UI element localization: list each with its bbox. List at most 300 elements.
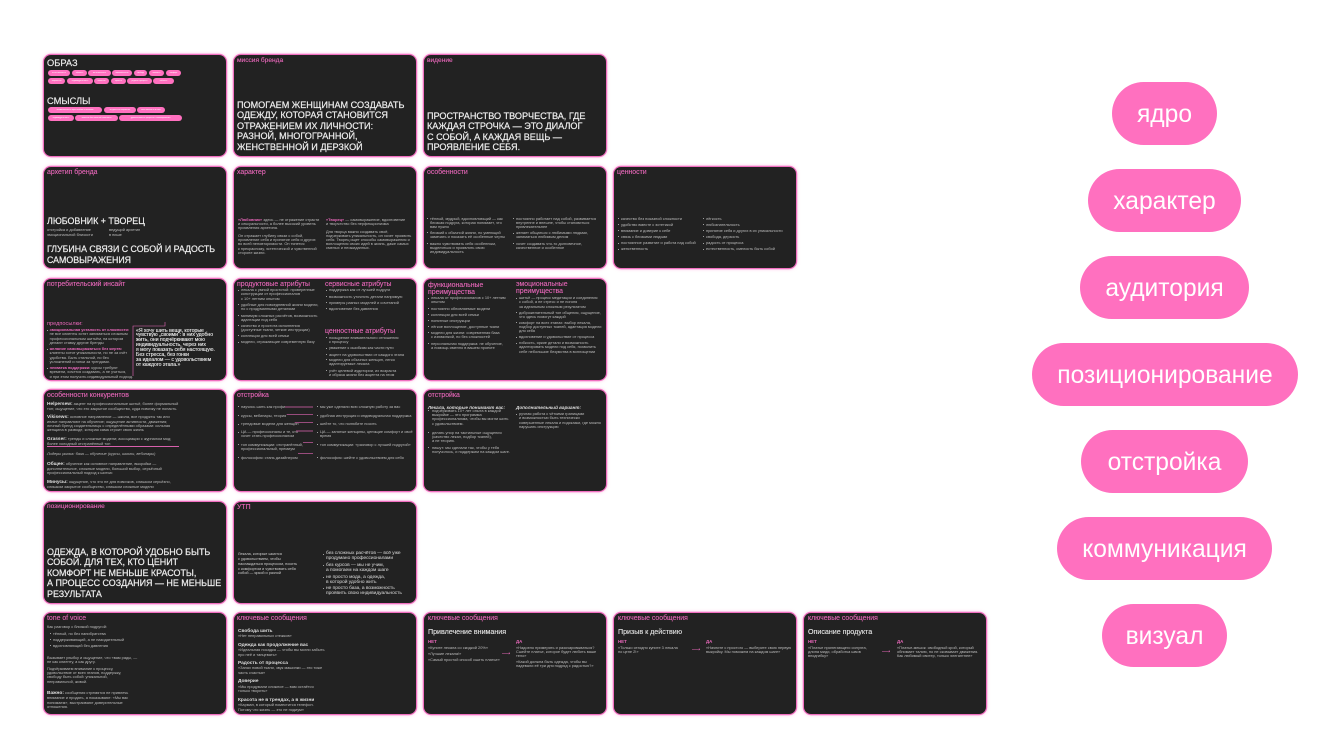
list item: внимание и доверие к себе [621,228,670,233]
text: любовник: «Любовник» здесь — не отражение страсти [238,217,319,222]
archetype statement [47,243,215,264]
list item [513,242,582,250]
list item: усложнений и гонки за трендами. [50,359,110,364]
mission statement [237,100,404,152]
subheading: Дополнительный вариант: [516,404,581,410]
tag: комфорт [166,70,181,76]
heading: особенности [427,169,468,176]
pill: коммуникация: коммуникация [1082,536,1247,563]
tag: лёгкость [72,70,87,76]
list item: в которой удобно жить [326,580,376,585]
panel: ключевые сообщения, смыслы [234,613,416,714]
intro text: Как разговор с близкой подругой: [47,624,107,629]
list item: опытом [431,299,445,304]
text: vikisews: иначе направляют на обучение; ощущение активности, движения; [47,419,167,424]
list item: минимум сложных расчётов, возможность [241,313,317,318]
list item [238,430,298,439]
list item: нарушать инструкцию [519,424,559,429]
heading: функциональные преимущества [428,282,484,296]
list item: понятные инструкции [431,318,470,323]
list item: без курсов — мы не учим, [326,563,384,568]
heading: эмоциональные преимущества: преимущества [516,288,563,295]
list item: поддержка как от лучшей подруги [329,287,390,292]
list item: индивидуальность [430,249,464,254]
unique proposition text: с удовольствием, чтобы [238,557,281,561]
list item [427,217,503,229]
yes item [897,645,978,658]
tag: индивидуальность [48,115,74,121]
quote frame [132,322,166,376]
list item: внутренне и внешне, чтобы становиться [516,220,589,225]
panel: отстройка, сравнение [234,390,416,491]
quote: от каждого этапа.» [136,362,180,368]
list item: тон коммуникации: «разговор с лучшей подругой» [320,442,411,447]
list item: трендовые модели для женщин [241,421,299,426]
list item: адаптации под себя [241,317,277,322]
list item: лекала с умной простотой: проверенные [241,287,315,292]
yes item: Сшейте платье, которое будет любить ваше [516,649,596,654]
callout: важно: отношения. [47,704,68,709]
tag: внимательность [48,107,102,113]
message: часть счастья» [238,670,265,675]
text: творец: «Творец» — самовыражение, вдохновение [326,217,405,222]
vision statement: КАЖДАЯ СТРОЧКА — ЭТО ДИАЛОГ [427,121,582,131]
text: grasser: более холодный отстранённый тон [47,441,110,446]
list item: модели для обычных женщин, легко [329,357,395,362]
pill: аудитория [1080,256,1249,319]
label: да: ДА [897,638,903,644]
text: common [47,461,162,475]
text: vikisews [47,414,170,432]
list item: философия: стань дизайнером [241,455,298,460]
tag: качество [94,78,109,84]
text: helpersew [47,401,178,411]
list item: тёплый, мудрый, вдохновляющий — как [430,216,503,221]
text: grasser: Grasser: тренды и сложные модели; ассоциации с журналом мод; [47,436,171,442]
list item: профессиональным шитьём, на котором [50,336,123,341]
quote: за идеалом — с удовольствием [136,357,211,363]
quote [136,328,215,368]
quote: «Я хочу шить вещи, которые [136,328,204,334]
yes item [706,645,791,654]
no item: «Лучшие лекала!» [428,651,461,656]
heading: ключевые сообщения [237,615,307,622]
message: про неё и танцевать» [238,652,277,656]
panel: особенности конкурентов [44,390,226,491]
list item: что здесь помогут каждой [519,314,566,319]
list item [513,217,596,229]
heading: характер [237,169,266,176]
callout: важно: Важно: сообщения стремятся не привлечь [47,690,128,696]
list item: для себя [519,328,535,333]
panel: привлечение внимания [424,613,606,714]
tag: женственность: женственность [93,72,106,74]
pill: отстройка: отстройка [1108,449,1221,476]
panel: архетип бренда [44,167,226,268]
list item [428,409,508,426]
list item: мы уже сделали всю сложную работу за вас [320,404,400,409]
label: нет: НЕТ [428,638,437,644]
quote: Без стресса, без гонки [136,352,189,358]
positioning statement: ОДЕЖДА, В КОТОРОЙ УДОБНО БЫТЬ [47,547,210,557]
list item: продумано профессионалами [326,556,393,561]
message: Красота не в трендах, а в жизни [238,698,314,703]
quote: чувствую „своими“: в них удобно [136,332,213,338]
unique proposition text [238,552,297,575]
text: downsides [47,479,171,489]
list item [238,303,318,311]
list item: женственность [621,246,648,251]
pill: позиционирование: позиционирование [1057,362,1273,389]
list item: качественное и особенное [516,245,564,250]
panel: УТП [234,502,416,603]
text: downsides: Минусы: ощущение, что это не для новичков, слишком серьёзно, [47,479,171,485]
positioning statement: СОБОЙ. ДЛЯ ТЕХ, КТО ЦЕНИТ [47,557,178,567]
panel: tone of voice [44,613,226,714]
tag: удовольствие: удовольствие от процесса и самовыражения [131,117,170,119]
list item: и возможностью быть технически [519,415,580,420]
tag: внимательность: внимательность через любовь к мелочам [57,109,93,111]
list item [427,231,505,239]
no item: «Только сегодня купите 3 лекала [618,645,678,650]
tag: комфорт: комфорт [170,72,177,74]
list item [323,564,388,573]
list item: профессиональный, премиум [241,446,295,451]
tag: качество без сложности: качество без показной сложности [82,117,111,119]
yes item [516,645,596,658]
list item: постоянно обновляемые модели [431,306,490,311]
list item: принятие себя и других в их уникальности [706,228,783,233]
tag: гибкость: гибкость [160,80,167,82]
message: «Мы продумали сложное — вам остаётся [238,684,314,689]
tag: качество без сложности [75,115,118,121]
list item: естественность, смелость быть собой [706,246,775,251]
note: secondary archetype: эмоциональной близости [47,232,93,237]
message: «Нет неправильных стежков» [238,633,292,638]
message: Одежда как продолжение вас [238,643,308,648]
heading: миссия бренда [237,57,283,64]
list item [428,331,500,339]
list item: коллекции для всей семьи [241,333,289,338]
unique proposition text: наслаждаться процессом, носить [238,562,297,566]
panel: атрибуты [234,279,416,380]
list item: с 10+ летним опытом [241,296,280,301]
message [238,698,314,712]
text: творец details [326,229,412,250]
quote: индивидуальность, через них [136,342,206,348]
no item: вподгибку» [808,653,828,658]
no item [618,645,678,654]
heading: продуктовые атрибуты: продуктовые атрибуты [237,281,310,288]
heading: эмоциональные преимущества: эмоциональные [516,281,568,288]
arrow [882,650,890,652]
panel: призыв к действию [614,613,796,714]
list item: выделяться и проявлять свою [430,245,485,250]
tag: лёгкость: лёгкость [76,72,83,74]
unique proposition text: Лекала, которые шьются [238,552,282,556]
note: leading archetype: ведущий архетип [109,227,140,232]
heading: особенности конкурентов [47,392,129,399]
yes item: выкройку. Мы поможем на каждом шаге» [706,649,780,654]
panel: потребительский инсайт [44,279,226,380]
pill: визуал [1102,604,1227,667]
list item [317,430,413,439]
list item [238,314,317,322]
text: common: дополнительное, сложные модели, большой выбор, серьёзный [47,466,162,471]
list item: тон коммуникации: отстранённый, [241,442,303,447]
list item: а помогаем на каждом шаге [326,568,388,573]
archetype statement: САМОВЫРАЖЕНИЯ [47,254,131,264]
list item: ручная работа с чёткими границами [519,411,584,416]
list item [326,369,396,377]
tag: яркость [111,78,126,84]
text: творец details: подчеркивать уникальность, он хочет проявить [326,233,411,238]
list item: коллекции для всей семьи [431,312,479,317]
tag: творчество: творчество [52,80,61,82]
list item: удобная инструкция и индивидуальная поддержка [320,413,411,418]
list item [428,342,503,350]
list item: замечать и показать её особенные черты [430,234,505,239]
yes item: «Надоело примерять и разочаровываться? [516,645,594,650]
pill: ядро [1112,82,1217,145]
subheading: предпосылки: предпосылки: [47,321,83,327]
list item [513,231,588,240]
text: market leaders: Лидеры рынка: база — обучение (курсы, школы, вебинары) [47,451,155,456]
pill: отстройка [1081,430,1248,493]
vision statement: ПРОЯВЛЕНИЕ СЕБЯ. [427,142,520,152]
label: нет: НЕТ [808,638,817,644]
list item: лёгкое воплощение, доступные ткани [431,324,499,329]
list item: качество и простота исполнения [241,323,300,328]
list item: модели, отражающие современную базу [241,339,315,344]
vision statement [427,111,586,152]
panel: позиционирование [44,502,226,603]
text: любовник details: проявление себя и принятие себя и других [238,237,316,242]
text block: неправильной, живой. [47,678,87,684]
yes item: «Начните с простого — выберите свою первую [706,645,791,650]
list item: вдохновение без давления [329,306,378,311]
list item: адаптировать модели под себя, позволить [519,344,596,349]
heading: ценности [617,169,647,176]
mission statement: ПОМОГАЕМ ЖЕНЩИНАМ СОЗДАВАТЬ [237,100,404,110]
tag: радость процесса: радость процесса [132,80,147,82]
list item: возможность уточнять детали напрямую [329,294,402,298]
quote: жить, они подчёркивают мою [136,337,205,343]
tag: радость процесса [127,78,152,84]
heading: смыслы: СМЫСЛЫ [47,96,90,106]
heading: ключевые сообщения [618,615,688,622]
list item: радость от процесса [706,240,743,245]
list item: постоянное развитие и работа над собой [621,240,696,245]
list item: клиенты хотят уникальности, но не за счёт [50,350,127,355]
tag: естественность: естественность [52,72,66,74]
list item: шейте то, что полюбите носить [320,421,377,426]
mission statement: ЖЕНСТВЕННОЙ И ДЕРЗКОЙ [237,142,363,152]
label: да: ДА [706,638,712,644]
tag: индивидуальность [67,78,93,84]
positioning statement: РЕЗУЛЬТАТА [47,589,102,599]
heading: видение [427,57,453,64]
tag: яркость: яркость [115,80,122,82]
list item [428,446,510,454]
unique proposition text: с комфортом и чувствовать себя [238,567,296,571]
tag: творчество [48,78,65,84]
list item: близкий к обычной жизни, но умеющий [430,230,501,235]
panel: преимущества [424,279,606,380]
list item: не просто база, а возможность [326,586,395,591]
message: «Запах новой ткани, звук машинки — это тоже [238,665,322,670]
no item: по цене 2!» [618,649,639,654]
tag: свобода [134,70,147,76]
message: Потому что жизнь — это не подиум» [238,706,304,712]
heading: ценностные атрибуты: ценностные атрибуты [325,328,395,334]
yes item: надевали её три дня подряд с радостью?» [516,663,594,668]
list item: вдохновение и удовольствие от процесса [519,334,594,339]
callout: важно: понимаем», выстраивают доверительные [47,700,123,705]
note: leading archetype [109,227,140,237]
arrow [502,652,510,654]
tag: удовольствие [119,115,182,121]
text: любовник details [238,233,317,255]
pill: аудитория: аудитория [1105,275,1224,302]
list item: не все клиенты хотят заниматься сложным [50,331,128,336]
divider line [47,445,179,448]
tag: женственность и сила [137,107,165,113]
heading: отстройка [428,392,460,399]
archetype name: ЛЮБОВНИК + ТВОРЕЦ [47,216,145,226]
mission statement: РАЗНОЙ, МНОГОГРАННОЙ, [237,131,358,141]
callout: важно: внимание и продать, а показывают: «Мы вас [47,695,128,700]
text: творец: и творчество без перфекционизма [326,221,389,226]
list item: свобода, дерзость [706,234,739,239]
panel: ценности [614,167,796,268]
heading: функциональные преимущества: преимущества [428,288,475,296]
heading: УТП [237,504,251,511]
message [238,643,324,657]
tag: мягкость [149,70,164,76]
list item [323,552,401,562]
list item: качество без показной сложности [621,216,682,221]
callout: важно [47,690,128,709]
heading: образ: ОБРАЗ [47,58,78,68]
list item: проявить свою индивидуальность [326,591,402,596]
list item: получилось, и поддержим на каждом шаге. [432,449,510,454]
list item: не просто мода, а одежда, [326,575,385,580]
heading: ключевые сообщения [428,615,498,622]
yes item: обнимает талию, но не сковывает движения. [897,649,978,654]
list item: (доступные ткани, четкие инструкции) [241,327,310,332]
list item [238,324,310,332]
heading: архетип бренда [47,169,97,176]
list item: вам нужно [430,224,449,229]
list item: за идеальным сложным результатом [519,304,586,309]
text: любовник details: стороне жизни. [238,250,266,255]
list item: заниматься любимым делом [516,234,568,239]
text: любовник: и сексуальности, а более высокий уровень [238,221,316,226]
tag: женственность [88,70,111,76]
list item: постоянно работает над собой, развивается [516,216,596,221]
list item: подбор доступных тканей, адаптация модели [519,324,601,329]
text: helpersew: тон; ощущение, что это закрытое сообщество, куда новичку не попасть. [47,406,177,411]
list item: совершенные лекала и подсказки, где можно [519,420,601,425]
tag: внутреннее творчество [104,107,136,113]
yes item: тело» [516,653,526,658]
list item [47,366,133,379]
list item: и образа жизни без акцента на этом [329,372,394,377]
tag: индивидуальность: индивидуальность [72,80,88,82]
panel: отстройка, лекала [424,390,606,491]
list item: желает общаться с любимыми людьми, [516,230,588,235]
pill: позиционирование [1032,343,1298,406]
list item: хочет стать профессионалом [241,433,294,438]
list item: поощрение внимательного отношения [329,335,399,340]
list item: делать упор на тактильные ощущения [432,430,502,435]
subheading: Описание продукта [808,628,872,636]
list item: любознательность [706,222,740,227]
yes item: Как любимый свитер, только элегантнее» [897,653,972,658]
text: творец details: Для творца важно создавать своё, [326,229,388,234]
list item: персональная поддержка: не обучение, [431,341,503,346]
list item: с собой, а не стресс и не погоня [519,299,577,304]
panel: образ и смыслы [44,55,226,156]
list item [516,296,598,309]
text block [47,666,121,684]
list item [427,242,496,254]
text block: удовольствие от всех этапов, поддержку, [47,670,121,675]
heading: ключевые сообщения [808,615,878,622]
list item: научись шить как профи [241,404,285,409]
text block: свободу быть собой: уникальной, [47,674,108,679]
text block [47,655,138,664]
list item: вдохновляющий без давления [53,643,108,648]
list item: модели для жизни: современная база [431,330,500,335]
list item: без сложных расчётов — всё уже [326,551,401,556]
yes item [516,659,594,668]
list item [516,321,601,334]
list item [326,336,399,344]
archetype statement: ГЛУБИНА СВЯЗИ С СОБОЙ И РАДОСТЬ [47,244,215,254]
text: vikisews: Vikisews: основное направление — школа, все продукты так или [47,414,170,420]
list item: связь с близкими людьми [621,234,667,239]
list item [428,431,502,444]
panel: миссия бренда [234,55,416,156]
list item: и при этом получить индивидуальный подход. [50,374,133,379]
list item [323,587,402,596]
tag: индивидуальность: индивидуальность [53,117,69,119]
note: secondary archetype [47,227,93,237]
list item: комфорт на всех этапах: выбор лекала, [519,320,591,325]
tag: естественность [48,70,70,76]
list item: с изюминкой, но без сложностей [431,334,490,339]
pill: характер: характер [1113,188,1216,215]
list item: адаптируемые лекала [329,361,369,366]
text: vikisews: личный бренд создательницы с определёнными образами: сильная [47,423,170,428]
list item: ЦА — занятые женщины, ценящие комфорт и своё [320,429,413,434]
list item: шитьё — процесс медитации и соединения [519,295,598,300]
text: любовник: проявления архетипа. [238,225,278,230]
list item: а не теорию. [432,438,455,443]
panel: особенности [424,167,606,268]
text: helpersew: Helpersew: акцент на профессиональные шитьё, более формальный [47,401,178,407]
list item: желание самовыражаться без жертв: [50,346,122,351]
no item: «Купите лекала со скидкой 20%» [428,645,488,650]
list item: а помощь именно в вашем проекте [431,345,495,350]
list item [238,443,303,451]
list item: удобные для повседневной жизни модели, [241,302,318,307]
heading: функциональные преимущества: функциональные [428,282,483,288]
list item: времени, хочется создавать, а не учиться, [50,369,126,374]
list item: пишут: мы сделали так, чтобы у тебя [432,445,499,450]
